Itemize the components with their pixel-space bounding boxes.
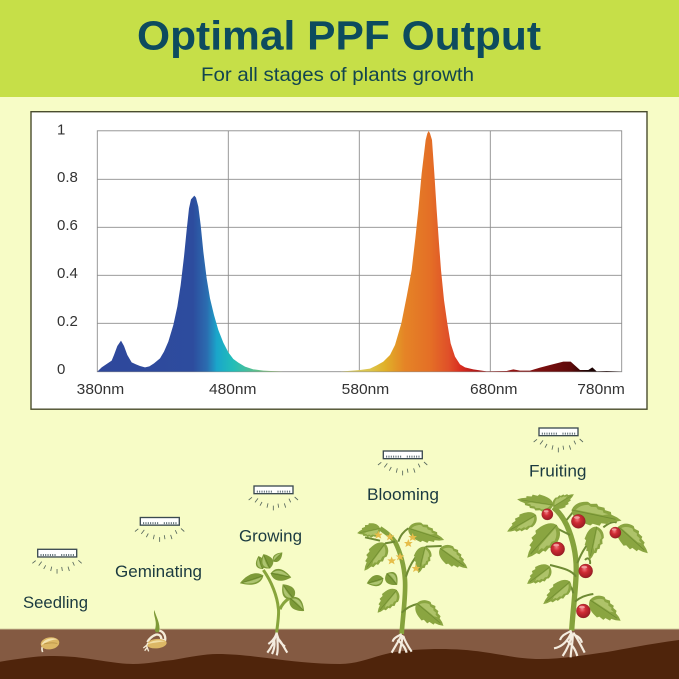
label: seedling: Seedling xyxy=(23,593,88,612)
x axis labels: 580nm xyxy=(342,381,389,398)
y axis labels: 0.8 xyxy=(57,169,78,186)
title: Optimal PPF Output xyxy=(137,12,541,58)
stage: fruiting xyxy=(503,428,655,657)
roots xyxy=(392,634,412,653)
tomatoes xyxy=(542,509,621,618)
icon: lamp above seedling xyxy=(32,549,82,574)
y axis labels xyxy=(57,122,78,378)
y axis labels: 0.6 xyxy=(57,217,78,234)
icon: lamp above blooming plant xyxy=(378,451,427,475)
y axis labels: 0 xyxy=(57,361,65,378)
header band xyxy=(0,0,679,97)
stage: growing xyxy=(238,486,308,655)
x axis labels: 480nm xyxy=(209,381,256,398)
chart grid xyxy=(97,131,622,372)
roots xyxy=(554,631,585,657)
icon: lamp above fruiting plant xyxy=(534,428,583,452)
roots xyxy=(267,633,287,655)
x axis labels: 680nm xyxy=(470,381,518,398)
icon: germinating seed xyxy=(143,610,167,651)
flowers xyxy=(374,531,420,572)
panel: spectrum chart xyxy=(31,112,647,409)
icon: young plant xyxy=(238,550,308,655)
label: blooming: Blooming xyxy=(367,485,439,504)
subtitle: For all stages of plants growth xyxy=(201,64,474,86)
soil xyxy=(0,628,679,679)
red spectrum peak xyxy=(340,131,622,372)
label: growing: Growing xyxy=(239,527,302,546)
stage: geminating xyxy=(115,518,202,651)
icon: flowering plant xyxy=(356,519,473,653)
label: geminating: Geminating xyxy=(115,562,202,581)
stage: seedling xyxy=(23,549,88,652)
label: fruiting: Fruiting xyxy=(529,462,586,481)
x axis labels: 780nm xyxy=(577,381,625,398)
y axis labels: 0.4 xyxy=(57,265,78,282)
y axis labels: 1 xyxy=(57,122,65,138)
blue spectrum peak xyxy=(97,196,297,372)
dark soil layer xyxy=(0,640,679,679)
x axis labels xyxy=(77,381,625,398)
icon: seed xyxy=(40,636,60,652)
y axis labels: 0.2 xyxy=(57,313,78,330)
stage: blooming xyxy=(356,451,473,653)
x axis labels: 380nm xyxy=(77,381,124,398)
icon: lamp above geminating seed xyxy=(135,518,184,542)
icon: lamp above growing plant xyxy=(249,486,298,510)
icon: tomato plant xyxy=(503,489,655,657)
